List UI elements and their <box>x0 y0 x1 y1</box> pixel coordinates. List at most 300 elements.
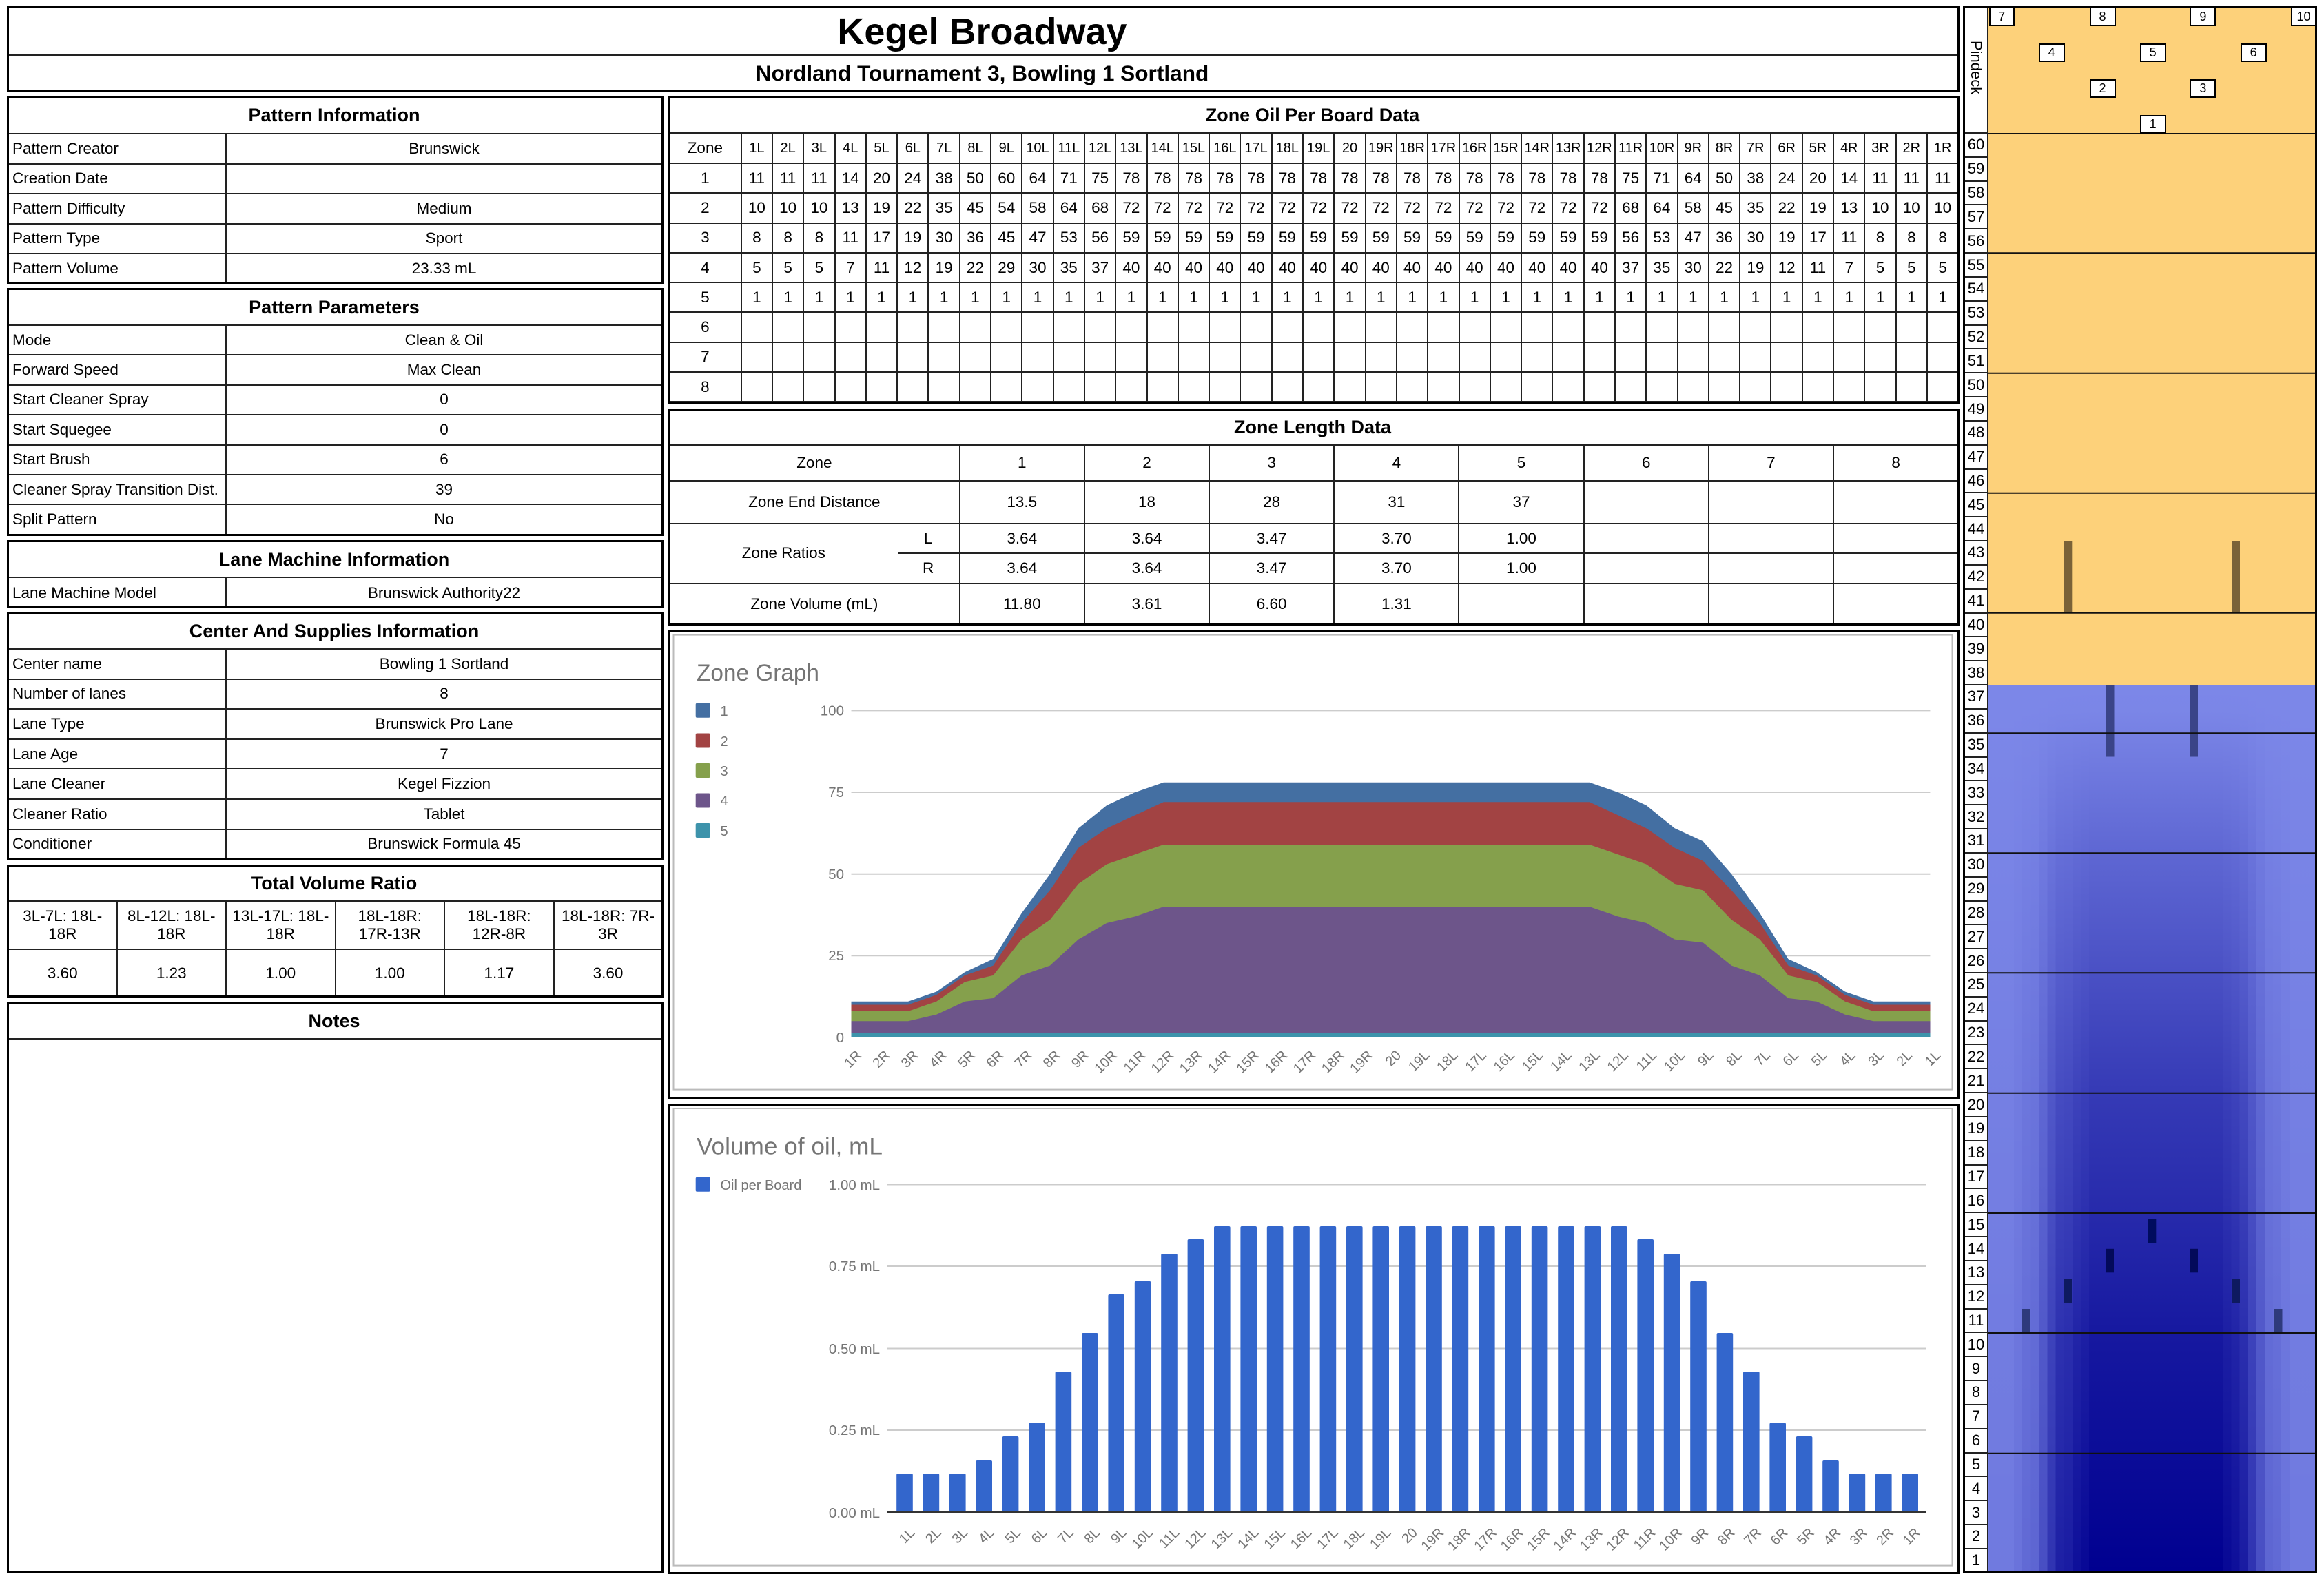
table: total volume ratio: 1.23 <box>156 964 187 981</box>
table: pattern information: Pattern Type <box>12 229 100 247</box>
x axis labels: 2R <box>870 1048 893 1071</box>
table: pattern information: Pattern Volume <box>12 260 119 277</box>
table: zone oil per board: 1 <box>1034 289 1042 306</box>
table: zone length data: 3.64 <box>1007 530 1037 547</box>
table: center and supplies: Center name <box>12 655 102 672</box>
table: zone oil per board: 78 <box>1122 169 1140 187</box>
y axis labels and gridlines: 0.25 mL <box>829 1423 880 1438</box>
x axis labels: 13R <box>1177 1048 1206 1076</box>
table: zone length data: 18 <box>1138 493 1155 510</box>
x axis labels: 4R <box>927 1048 950 1071</box>
table: zone oil per board: 15R <box>1493 141 1519 156</box>
table: zone oil per board: 59 <box>1122 229 1140 246</box>
table: zone oil per board: 78 <box>1497 169 1514 187</box>
table: zone oil per board: 78 <box>1216 169 1233 187</box>
lane distance numbers: 60 <box>1968 136 1984 153</box>
table: zone oil per board: 4R <box>1840 141 1858 156</box>
table: zone oil per board: 1 <box>1501 289 1510 306</box>
table: zone oil per board: 40 <box>1216 259 1233 276</box>
x axis labels: 17R <box>1471 1525 1500 1553</box>
table: zone oil per board: 4L <box>843 141 858 156</box>
x axis labels: 10R <box>1091 1048 1120 1076</box>
table: zone oil per board: 1 <box>1813 289 1822 306</box>
table: zone length data: 6.60 <box>1257 595 1287 612</box>
x axis labels: 11L <box>1156 1525 1182 1551</box>
chart title: zone graph: Zone Graph <box>697 660 819 686</box>
table: zone length data: 4 <box>1392 454 1401 471</box>
table: zone oil per board: 12 <box>1778 259 1796 276</box>
table: zone length data: 3.47 <box>1257 559 1287 577</box>
x axis labels: 3R <box>898 1048 921 1071</box>
x axis labels <box>841 1048 1944 1076</box>
lane distance numbers: 19 <box>1968 1119 1984 1137</box>
table: zone oil per board: 2 <box>701 199 710 216</box>
lane distance numbers: 18 <box>1968 1144 1984 1161</box>
table: zone length data: 3.64 <box>1132 559 1162 577</box>
x axis labels: 17R <box>1290 1048 1319 1076</box>
x axis labels: 12L <box>1182 1525 1209 1552</box>
table: zone oil per board: 5 <box>815 259 823 276</box>
table: zone oil per board: 45 <box>967 199 984 216</box>
pin 2 <box>2089 79 2115 98</box>
table: zone oil per board: 10R <box>1649 141 1674 156</box>
table: zone oil per board: 1 <box>1002 289 1011 306</box>
table: zone oil per board: 59 <box>1279 229 1296 246</box>
table: zone oil per board: 1 <box>940 289 948 306</box>
panel: notes <box>7 1002 664 1573</box>
table: lane machine <box>12 578 520 606</box>
table: zone oil per board: 1 <box>1439 289 1448 306</box>
table: zone oil per board: 72 <box>1528 199 1545 216</box>
table: zone oil per board: 1 <box>1532 289 1541 306</box>
table: total volume ratio: 18L-18R: <box>358 907 422 924</box>
lane distance numbers: 27 <box>1968 928 1984 945</box>
table: center and supplies: Brunswick Formula 45 <box>367 835 521 852</box>
lane distance numbers: 23 <box>1968 1024 1984 1041</box>
table: zone oil per board: 18R <box>1399 141 1425 156</box>
table: pattern parameters: Max Clean <box>407 361 481 378</box>
x axis labels: 8L <box>1082 1525 1103 1547</box>
table: zone oil per board: 1 <box>1782 289 1791 306</box>
table: pattern parameters: Split Pattern <box>12 510 97 528</box>
table: zone oil per board: 1 <box>1127 289 1135 306</box>
table: zone oil per board: 56 <box>1622 229 1639 246</box>
table: zone oil per board: 11 <box>1904 169 1920 187</box>
table: zone oil per board: 78 <box>1154 169 1171 187</box>
table: zone oil per board: 5L <box>874 141 890 156</box>
y axis labels and gridlines: 1.00 mL <box>829 1177 880 1193</box>
table: zone oil per board: 10 <box>1871 199 1889 216</box>
x axis labels: 13L <box>1576 1048 1603 1075</box>
table: zone oil per board: 1 <box>701 169 710 187</box>
table: zone oil per board: 13 <box>842 199 859 216</box>
lane distance numbers: 26 <box>1968 952 1984 969</box>
table: zone oil per board: 15L <box>1182 141 1205 156</box>
pin 4: 4 <box>2048 45 2055 59</box>
panel: zone graph chart <box>668 630 1960 1099</box>
table: center and supplies: 7 <box>440 745 449 763</box>
x axis labels: 1R <box>1900 1525 1923 1549</box>
table: total volume ratio: 13L-17L: 18L- <box>232 907 329 924</box>
table: total volume ratio: 3L-7L: 18L- <box>23 907 102 924</box>
table: pattern parameters: 39 <box>435 481 453 498</box>
lane distance numbers: 22 <box>1968 1048 1984 1065</box>
table: zone oil per board: 53 <box>1653 229 1670 246</box>
table: center and supplies: Brunswick Pro Lane <box>375 715 513 732</box>
table: zone oil per board: 17L <box>1244 141 1268 156</box>
title: Kegel Broadway <box>837 11 1127 52</box>
table: zone oil per board: 1 <box>1844 289 1853 306</box>
table: center and supplies: Lane Cleaner <box>12 775 105 792</box>
lane distance numbers <box>1965 134 1988 1571</box>
pin 9 <box>2190 8 2216 26</box>
pin 1: 1 <box>2150 117 2157 131</box>
table: zone oil per board: 11 <box>1935 169 1951 187</box>
table: zone oil per board: 10L <box>1026 141 1049 156</box>
table: zone oil per board: 40 <box>1497 259 1514 276</box>
table: zone length data: 13.5 <box>1007 493 1037 510</box>
table: zone oil per board: 2R <box>1903 141 1920 156</box>
lane distance numbers: 42 <box>1968 568 1984 585</box>
title <box>9 8 1957 56</box>
lane distance numbers: 13 <box>1968 1263 1984 1281</box>
table: zone oil per board: 72 <box>1341 199 1358 216</box>
table: zone oil per board: 40 <box>1248 259 1265 276</box>
pin 10: 10 <box>2296 10 2311 23</box>
legend: zones: 1 <box>721 704 728 719</box>
lane distance numbers: 8 <box>1972 1383 1980 1401</box>
table: zone oil per board: 59 <box>1341 229 1358 246</box>
table: pattern parameters: Start Squegee <box>12 421 112 438</box>
table: zone oil per board: 4 <box>701 259 710 276</box>
table: zone oil per board: 59 <box>1591 229 1608 246</box>
table: zone oil per board: 12R <box>1587 141 1612 156</box>
heading: total volume ratio <box>9 867 661 902</box>
heading: center and supplies <box>9 614 661 650</box>
lane distance numbers: 45 <box>1968 496 1984 513</box>
table: zone oil per board: 40 <box>1560 259 1577 276</box>
y axis labels and gridlines: 25 <box>828 948 844 964</box>
table: zone oil per board: 12 <box>904 259 921 276</box>
label: pindeck: Pindeck <box>1968 41 1985 94</box>
subtitle: Nordland Tournament 3, Bowling 1 Sortland <box>756 61 1209 85</box>
x axis labels: 16R <box>1498 1525 1526 1553</box>
lane distance numbers: 31 <box>1968 831 1984 849</box>
table: zone oil per board: 78 <box>1185 169 1202 187</box>
lane distance numbers: 20 <box>1968 1096 1984 1113</box>
area chart: oil units per board by zone <box>852 783 1930 1037</box>
table: zone length data: 5 <box>1517 454 1525 471</box>
table: zone oil per board: 50 <box>1716 169 1733 187</box>
table: zone oil per board: 3 <box>701 229 710 246</box>
table: zone oil per board: 72 <box>1497 199 1514 216</box>
table: zone oil per board: 1 <box>1595 289 1604 306</box>
table: zone oil per board: 24 <box>1778 169 1796 187</box>
table: zone oil per board: 45 <box>998 229 1015 246</box>
table: zone length data: 1.31 <box>1381 595 1412 612</box>
lane oil heat map <box>1988 8 2315 1571</box>
heading: notes <box>9 1004 661 1040</box>
panel: zone oil per board data <box>668 96 1960 404</box>
table: zone oil per board: 7L <box>936 141 952 156</box>
x axis labels: 20 <box>1399 1525 1421 1547</box>
pin 2: 2 <box>2099 81 2106 95</box>
table: zone oil per board: 8 <box>1938 229 1947 246</box>
label: pindeck <box>1965 8 1988 134</box>
table: zone oil per board: 1 <box>1626 289 1635 306</box>
x axis labels: 18L <box>1434 1048 1461 1075</box>
table: pattern information: Brunswick <box>409 140 480 157</box>
table: zone oil per board: 59 <box>1560 229 1577 246</box>
table: zone oil per board: 8 <box>783 229 792 246</box>
table: zone oil per board: 40 <box>1341 259 1358 276</box>
lane distance numbers: 17 <box>1968 1168 1984 1185</box>
table: zone oil per board: 30 <box>1029 259 1047 276</box>
dry lane area <box>1988 8 2315 685</box>
table: zone oil per board: 47 <box>1029 229 1047 246</box>
x axis labels: 1R <box>841 1048 865 1071</box>
x axis labels: 12R <box>1149 1048 1177 1076</box>
lane distance numbers: 12 <box>1968 1288 1984 1305</box>
table: lane machine: Brunswick Authority22 <box>368 584 520 601</box>
table: zone oil per board: 1 <box>815 289 823 306</box>
heading: lane machine information: Lane Machine Information <box>219 548 449 569</box>
x axis labels: 14L <box>1547 1048 1574 1075</box>
table: zone oil per board: 59 <box>1154 229 1171 246</box>
x axis labels: 7R <box>1741 1525 1765 1549</box>
pin 5: 5 <box>2150 45 2157 59</box>
table: zone oil per board: 8 <box>752 229 761 246</box>
table: zone oil per board: 5 <box>752 259 761 276</box>
x axis labels: 5L <box>1002 1525 1024 1547</box>
table: total volume ratio: 18R <box>157 925 185 942</box>
table: zone oil per board: 40 <box>1185 259 1202 276</box>
table: zone oil per board: 1 <box>971 289 980 306</box>
table: zone oil per board: 78 <box>1591 169 1608 187</box>
x axis labels: 20 <box>1383 1048 1404 1069</box>
x axis labels: 14L <box>1235 1525 1262 1552</box>
table: zone oil per board: 1 <box>1283 289 1292 306</box>
panel: volume of oil chart <box>668 1104 1960 1574</box>
table: zone oil per board: 59 <box>1216 229 1233 246</box>
lane distance numbers: 41 <box>1968 592 1984 609</box>
table: zone oil per board: 1 <box>1689 289 1698 306</box>
table: zone oil per board: 40 <box>1154 259 1171 276</box>
y axis labels and gridlines: 50 <box>828 867 844 882</box>
table: zone oil per board: 72 <box>1122 199 1140 216</box>
x axis labels: 19L <box>1406 1048 1432 1075</box>
table: zone oil per board: 1 <box>1876 289 1884 306</box>
targeting marks at 35-37 ft <box>2106 685 2198 756</box>
x axis labels: 9R <box>1069 1048 1092 1071</box>
table: zone oil per board: 38 <box>1747 169 1764 187</box>
x axis labels: 18R <box>1445 1525 1474 1553</box>
table: total volume ratio: 18R <box>267 925 295 942</box>
lane distance numbers: 36 <box>1968 712 1984 729</box>
table: zone oil per board: 11 <box>749 169 765 187</box>
table: zone length data <box>670 446 1957 623</box>
table: pattern information: Creation Date <box>12 169 108 187</box>
table: zone oil per board: 72 <box>1434 199 1452 216</box>
table: zone oil per board: 35 <box>1060 259 1078 276</box>
x axis labels: 10L <box>1661 1048 1688 1075</box>
table: total volume ratio: 3R <box>598 925 618 942</box>
table: zone oil per board: 1 <box>846 289 854 306</box>
x axis labels: 5R <box>955 1048 978 1071</box>
table: zone oil per board: 5 <box>1938 259 1947 276</box>
lane distance numbers: 28 <box>1968 904 1984 921</box>
lane distance numbers: 3 <box>1972 1504 1980 1521</box>
x axis labels: 11L <box>1634 1048 1660 1074</box>
table: zone oil per board: 11 <box>1810 259 1826 276</box>
table: total volume ratio: 8L-12L: 18L- <box>127 907 216 924</box>
legend: zones: 3 <box>721 764 728 779</box>
x axis labels: 1L <box>1922 1048 1944 1069</box>
x axis labels: 8R <box>1715 1525 1738 1549</box>
table: zone length data: 3.61 <box>1132 595 1162 612</box>
table: zone oil per board <box>670 134 1957 402</box>
x axis labels: 11R <box>1631 1525 1658 1553</box>
table: zone oil per board: 8 <box>1876 229 1884 246</box>
table: zone oil per board: 1 <box>1720 289 1729 306</box>
table: zone oil per board: 7 <box>846 259 854 276</box>
table: zone oil per board: 75 <box>1091 169 1109 187</box>
panel: lane diagram <box>1963 6 2317 1573</box>
lane distance numbers: 55 <box>1968 256 1984 273</box>
pin 7: 7 <box>1998 10 2005 23</box>
table: total volume ratio: 1.00 <box>265 964 296 981</box>
table: zone length data: 37 <box>1513 493 1530 510</box>
table: zone oil per board: 5 <box>701 289 710 306</box>
x axis labels: 3L <box>949 1525 971 1547</box>
table: zone oil per board: 19 <box>1747 259 1764 276</box>
pin 7 <box>1989 8 2015 26</box>
table: center and supplies: Kegel Fizzion <box>398 775 491 792</box>
legend: zones: 2 <box>721 734 728 750</box>
table: zone oil per board: 7R <box>1747 141 1765 156</box>
table: zone oil per board: 19 <box>873 199 890 216</box>
table: zone oil per board: 59 <box>1434 229 1452 246</box>
x axis labels: 6R <box>983 1048 1007 1071</box>
table: zone length data: 11.80 <box>1003 595 1041 612</box>
table: zone oil per board: 35 <box>1653 259 1670 276</box>
x axis labels: 16R <box>1262 1048 1290 1076</box>
table: center and supplies: Conditioner <box>12 835 92 852</box>
table: zone oil per board: 8 <box>1907 229 1916 246</box>
lane arrows <box>2022 1219 2282 1333</box>
table: zone oil per board: 19 <box>904 229 921 246</box>
table: zone oil per board: 5 <box>1907 259 1916 276</box>
panel: title block <box>7 6 1960 92</box>
table: zone length data: 6 <box>1642 454 1650 471</box>
heading: pattern information <box>9 98 661 134</box>
table: zone oil per board: 11 <box>780 169 796 187</box>
table: zone length data: Zone <box>796 454 832 471</box>
table: zone oil per board: 16L <box>1213 141 1236 156</box>
table: zone length data: 3.70 <box>1381 530 1412 547</box>
table: zone oil per board: 1 <box>1658 289 1666 306</box>
x axis labels: 8L <box>1723 1048 1745 1069</box>
y axis labels and gridlines: 0.50 mL <box>829 1341 880 1357</box>
lane distance numbers: 59 <box>1968 160 1984 177</box>
lane distance numbers: 37 <box>1968 688 1984 705</box>
table: zone oil per board: 11L <box>1058 141 1080 156</box>
table: pattern parameters: 6 <box>440 451 449 468</box>
table: zone oil per board: 5R <box>1809 141 1827 156</box>
table: zone oil per board: 8R <box>1716 141 1733 156</box>
table: total volume ratio: 18L-18R: <box>467 907 531 924</box>
x axis labels: 13R <box>1577 1525 1606 1553</box>
table: zone oil per board: 9L <box>999 141 1014 156</box>
x axis labels: 6R <box>1768 1525 1791 1549</box>
table: zone oil per board: 17 <box>873 229 890 246</box>
lane distance numbers: 49 <box>1968 400 1984 417</box>
x axis labels: 9L <box>1108 1525 1129 1547</box>
table: zone length data: L <box>924 530 932 547</box>
table: pattern information: 23.33 mL <box>412 260 476 277</box>
pin 1 <box>2140 115 2166 134</box>
table: zone oil per board: 72 <box>1279 199 1296 216</box>
x axis labels: 18L <box>1341 1525 1368 1552</box>
lane distance numbers: 6 <box>1972 1432 1980 1449</box>
x axis labels: 19L <box>1367 1525 1394 1552</box>
table: zone oil per board: 1 <box>752 289 761 306</box>
table: zone oil per board: 3L <box>812 141 827 156</box>
x axis labels: 3R <box>1847 1525 1871 1549</box>
pin 8 <box>2089 8 2115 26</box>
table: zone oil per board: 59 <box>1497 229 1514 246</box>
panel: center and supplies information <box>7 612 664 860</box>
table: zone length data: 3.47 <box>1257 530 1287 547</box>
table: zone oil per board: 1 <box>783 289 792 306</box>
x axis labels <box>896 1525 1923 1553</box>
table: zone oil per board: 30 <box>1747 229 1764 246</box>
table: zone length data: Zone Volume (mL) <box>750 595 878 612</box>
table: zone oil per board: 59 <box>1248 229 1265 246</box>
table: zone oil per board: 1 <box>1065 289 1073 306</box>
table: zone oil per board: 14 <box>1840 169 1858 187</box>
table: zone oil per board: 59 <box>1466 229 1483 246</box>
lane distance numbers: 39 <box>1968 640 1984 657</box>
table: zone oil per board: 10 <box>1934 199 1951 216</box>
x axis labels: 7L <box>1055 1525 1077 1547</box>
table: zone oil per board: 64 <box>1029 169 1047 187</box>
table: zone oil per board: 78 <box>1372 169 1390 187</box>
table: zone oil per board: 64 <box>1685 169 1702 187</box>
table: zone oil per board: Zone <box>688 139 723 156</box>
table: center and supplies: 8 <box>440 685 449 702</box>
table: zone oil per board: 11 <box>1872 169 1889 187</box>
x axis labels: 3L <box>1865 1048 1887 1069</box>
table: zone oil per board: 68 <box>1091 199 1109 216</box>
table: zone oil per board: 20 <box>1342 141 1357 156</box>
table: zone oil per board: 37 <box>1091 259 1109 276</box>
table: zone oil per board: 11 <box>843 229 858 246</box>
lane distance numbers: 10 <box>1968 1336 1984 1353</box>
table: zone oil per board: 30 <box>1685 259 1702 276</box>
table: total volume ratio: 12R-8R <box>473 925 526 942</box>
x axis labels: 2R <box>1873 1525 1897 1549</box>
x axis labels: 19R <box>1347 1048 1376 1076</box>
heading: pattern information: Pattern Information <box>248 105 420 125</box>
legend: zones <box>696 703 728 839</box>
table: zone length data: 2 <box>1142 454 1151 471</box>
table: zone oil per board: 56 <box>1091 229 1109 246</box>
table: zone oil per board: 75 <box>1622 169 1639 187</box>
table: zone oil per board: 14L <box>1151 141 1174 156</box>
table: zone oil per board: 5 <box>783 259 792 276</box>
table: zone oil per board: 1 <box>1470 289 1479 306</box>
